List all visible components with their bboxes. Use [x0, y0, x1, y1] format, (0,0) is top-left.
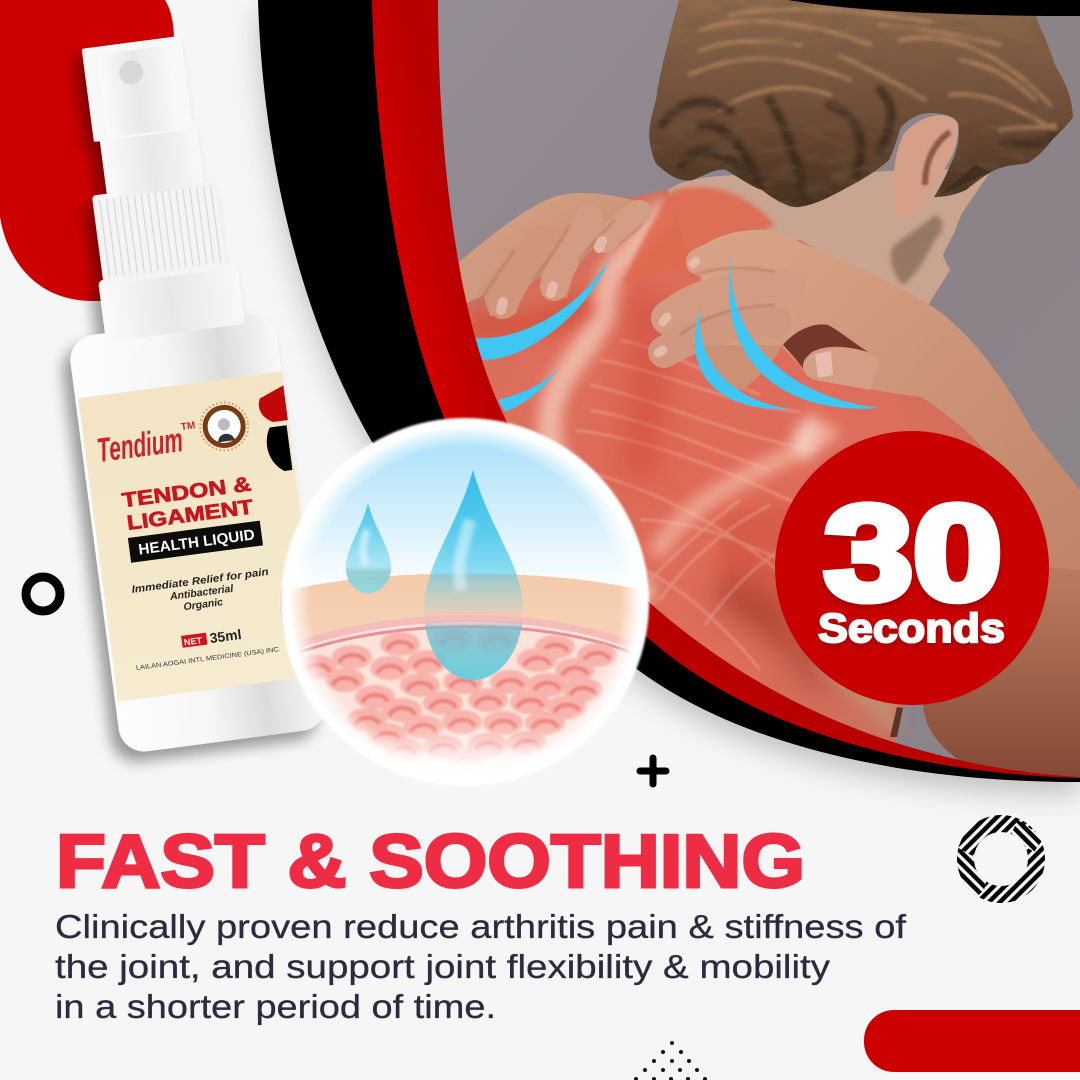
headline: FAST & SOOTHING [56, 819, 805, 903]
product label: TM [180, 420, 196, 433]
seal [197, 400, 251, 453]
curved black and red swoosh [258, 0, 1080, 782]
soft white fade at bottom [372, 722, 552, 774]
pain relief blue arcs [472, 255, 880, 412]
30 seconds badge [775, 431, 1049, 705]
maker line: LAILAN AOGAI INTL MEDICINE (USA) INC. [136, 646, 281, 672]
face and stubble [888, 169, 990, 286]
left hand on shoulder [456, 193, 651, 316]
torso with red muscle overlay [459, 190, 989, 743]
black band: HEALTH LIQUID [137, 526, 256, 559]
net content [181, 626, 242, 650]
product label [78, 371, 321, 702]
nozzle inner panel and hole [97, 46, 179, 138]
ear [894, 115, 958, 217]
heart decoration [257, 385, 288, 424]
benefits [131, 566, 272, 620]
benefits: Organic [183, 596, 224, 613]
photo backdrop [430, 0, 1080, 790]
benefits: Antibacterial [168, 583, 235, 603]
product label: LIGAMENT [125, 495, 255, 535]
net content: NET [183, 635, 203, 647]
benefits: Immediate Relief for pain [131, 566, 269, 596]
body copy [55, 908, 907, 1025]
spray bottle [30, 28, 328, 755]
body copy: in a shorter period of time. [55, 988, 496, 1025]
body copy: the joint, and support joint flexibility & mobility [55, 948, 831, 985]
hair [640, 0, 1080, 220]
body copy: Clinically proven reduce arthritis pain & stiffness of [55, 908, 907, 945]
ribbed cap lines [100, 185, 221, 277]
halftone dot triangle [634, 1041, 707, 1080]
heading on label: TENDON & [121, 473, 253, 512]
right hand gripping neck [658, 230, 1080, 570]
sky [304, 428, 626, 576]
decorative red rounded blob [0, 0, 174, 301]
bottle body [67, 311, 328, 755]
striped ring [957, 815, 1045, 903]
skin band [292, 574, 639, 649]
30 seconds badge: Seconds [818, 605, 1005, 651]
heart illustration [277, 580, 320, 667]
net content: 35ml [209, 626, 242, 646]
red pill bottom right [864, 1010, 1080, 1072]
small water drop [346, 503, 391, 593]
plus sign [640, 758, 666, 784]
30 seconds badge: 30 [824, 479, 1002, 628]
cells [297, 628, 617, 772]
photo: man holding his sore neck and shoulder [430, 0, 1080, 790]
black corner curve top right [788, 0, 1080, 16]
black band [128, 521, 263, 563]
shoulder-side arm and shadow line [890, 567, 1080, 777]
neck [668, 170, 950, 310]
skin absorption circle [280, 416, 651, 784]
large water drop [424, 470, 523, 680]
brand name: Tendium [95, 421, 185, 470]
small black ring [26, 577, 60, 611]
